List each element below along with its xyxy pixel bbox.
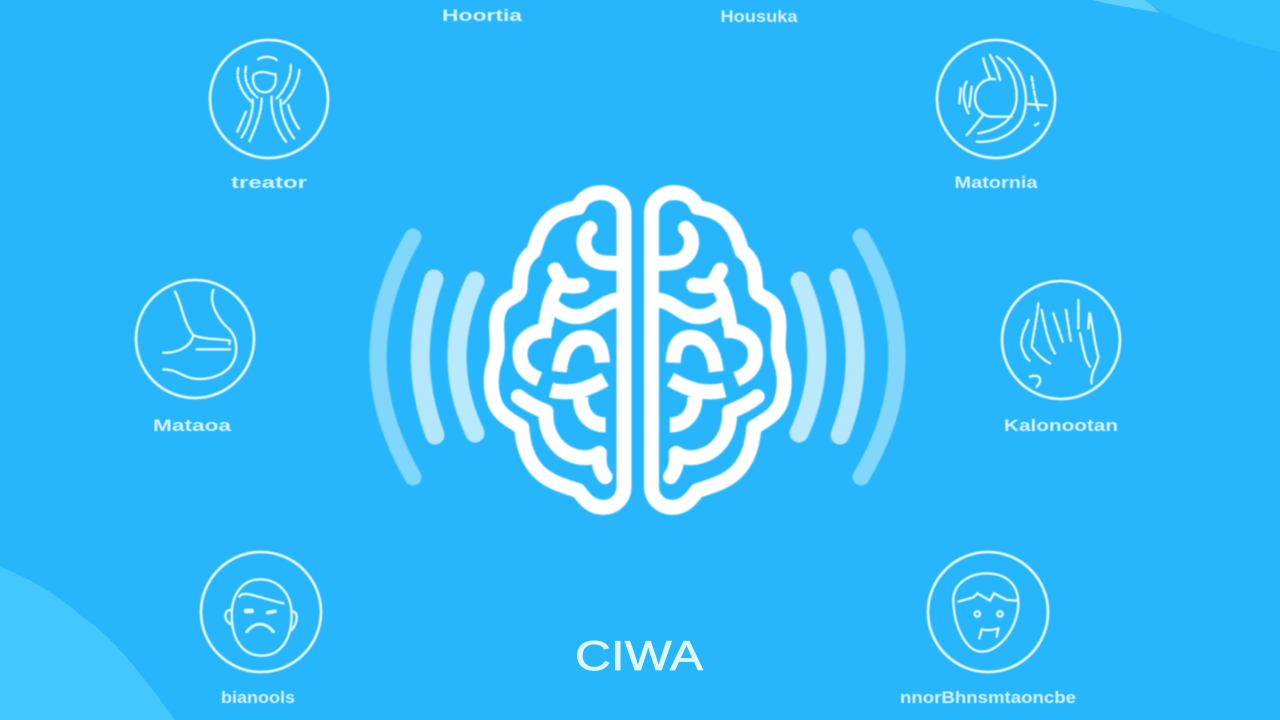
label: worried face: nnorBhnsmtaoncbe [900, 688, 1076, 707]
icon: sad face [201, 552, 321, 672]
right hemisphere [652, 193, 784, 507]
corner highlight: top right [1093, 0, 1160, 13]
icon: worried face [928, 552, 1048, 672]
label: top centre left: Hoortia [442, 6, 523, 25]
sound waves: right [799, 237, 897, 477]
label: sad face: bianools [221, 688, 295, 707]
sound waves: left [378, 237, 475, 477]
title: CIWA [575, 632, 703, 679]
icon: hand [1002, 281, 1120, 399]
corner shape: top right [1145, 0, 1280, 52]
icon: foot [136, 280, 254, 398]
label: hands: treator [231, 173, 308, 192]
label: hand: Kalonootan [1004, 416, 1118, 435]
label: foot: Mataoa [153, 416, 232, 435]
brain icon [491, 193, 784, 507]
corner shape: bottom left [0, 567, 175, 720]
icon: head profile [937, 40, 1055, 158]
icon: hands [210, 40, 328, 158]
label: head profile: Matornia [954, 173, 1038, 192]
label: top centre right: Housuka [720, 7, 798, 26]
left hemisphere [491, 193, 624, 507]
